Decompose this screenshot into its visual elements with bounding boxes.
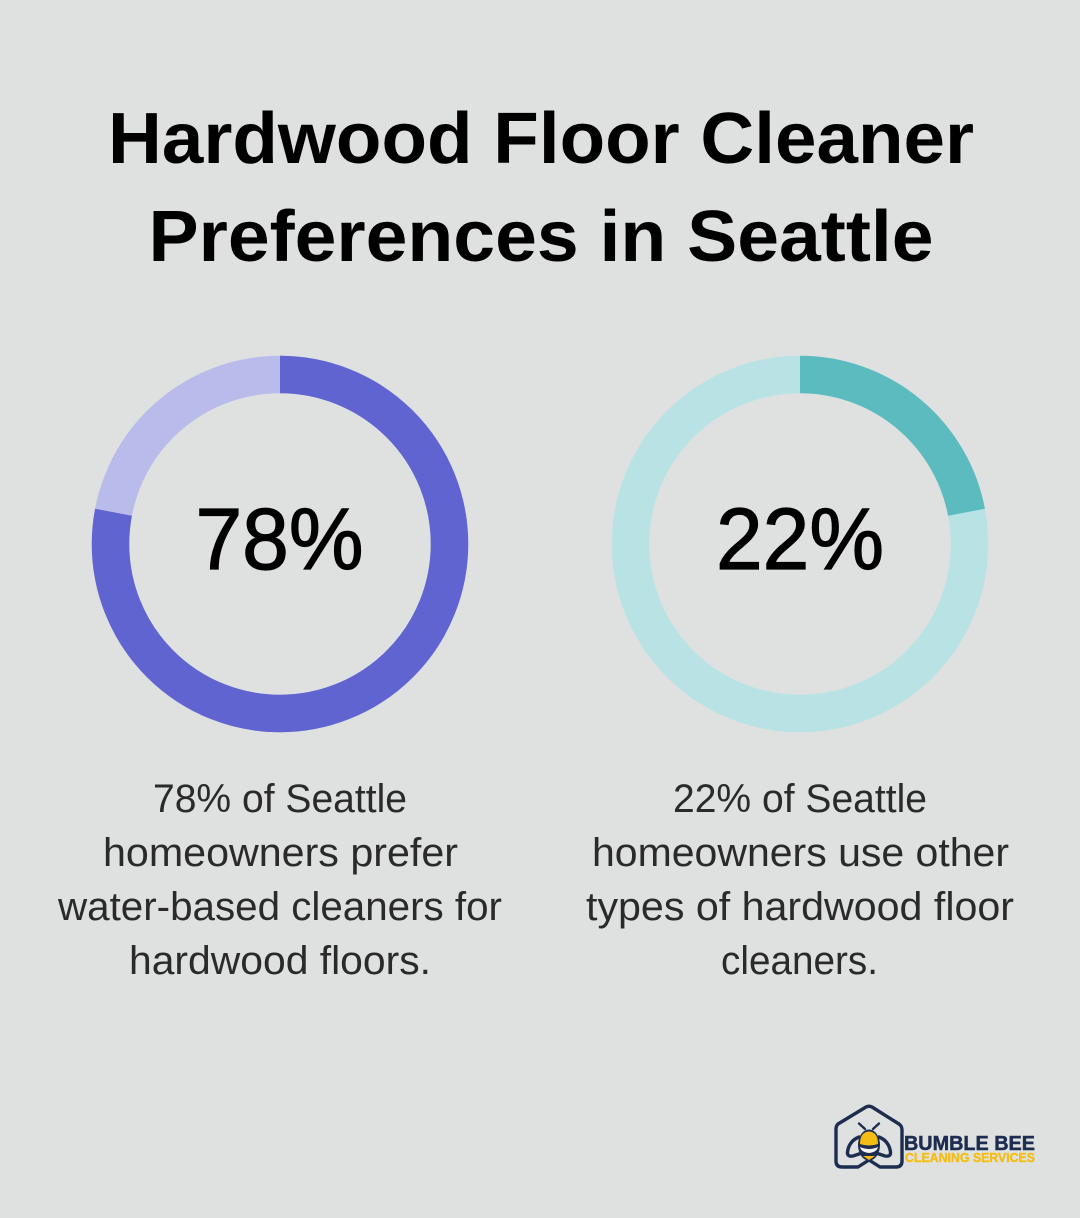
value: 78%: 78% xyxy=(196,491,364,588)
description: 22% xyxy=(586,777,1014,983)
panel: other cleaners 22% xyxy=(586,374,1014,983)
description: 78%: 78% of Seattle xyxy=(153,777,407,821)
icon: house with bee xyxy=(836,1106,902,1167)
value: 22%: 22% xyxy=(716,491,884,588)
logo wordmark: BUMBLE BEE xyxy=(904,1132,1035,1155)
donut chart: 78% xyxy=(110,374,450,714)
description: 22%: 22% of Seattle xyxy=(673,777,927,821)
description: 78%: homeowners prefer xyxy=(103,831,458,875)
donut chart: 22% xyxy=(630,374,970,714)
logo: Bumble Bee Cleaning Services xyxy=(836,1106,1035,1167)
description: 78%: hardwood floors. xyxy=(129,939,431,983)
description: 78%: water-based cleaners for xyxy=(57,885,502,929)
description: 78% xyxy=(57,777,502,983)
title: Hardwood Floor Cleaner xyxy=(108,99,974,179)
logo tagline: CLEANING SERVICES xyxy=(905,1151,1035,1165)
description: 22%: types of hardwood floor xyxy=(586,885,1014,929)
title: Preferences in Seattle xyxy=(148,197,934,277)
description: 22%: homeowners use other xyxy=(592,831,1009,875)
title xyxy=(108,99,974,277)
panel: water-based cleaners 78% xyxy=(57,374,502,983)
description: 22%: cleaners. xyxy=(721,939,878,983)
